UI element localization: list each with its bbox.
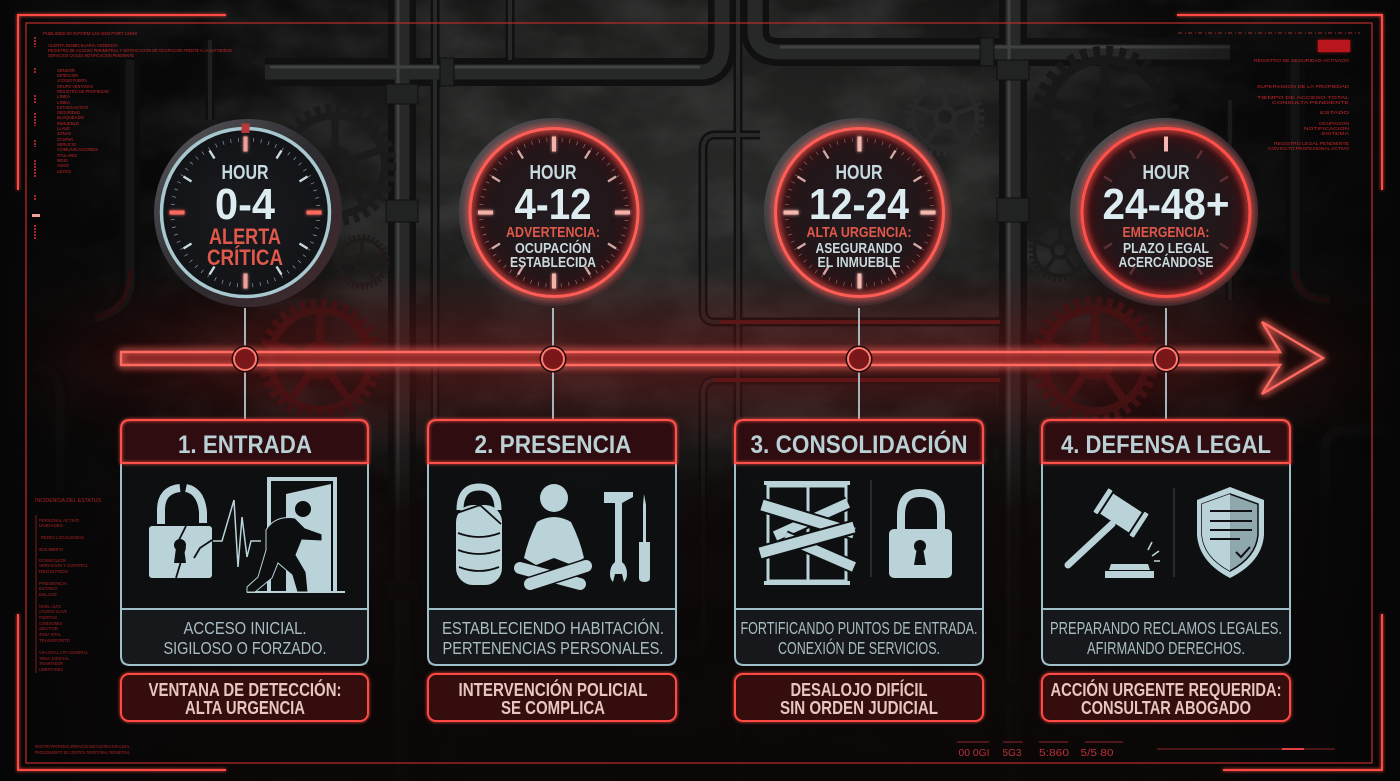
hud micro text: left middle list: UTILIDAD CLAVE xyxy=(39,609,67,615)
panel 1 description: SIGILOSO O FORZADO. xyxy=(164,638,326,658)
hud micro text: top right: CONSULTA PENDIENTE xyxy=(1272,100,1349,106)
hud micro text: left middle list: ENLACE xyxy=(39,592,57,598)
hud micro text: top left: TITULARES xyxy=(57,153,77,159)
hud micro readouts: bottom right: 00 0GI xyxy=(958,748,990,759)
hud micro text: top left: REDES xyxy=(57,158,68,164)
clock 2 text: ESTABLECIDA xyxy=(510,255,596,271)
hud micro text: top left: SEGURIDAD xyxy=(57,110,80,116)
timeline nodes xyxy=(232,346,1180,372)
callout 4 xyxy=(1042,674,1290,721)
clock 1 text: ALERTA xyxy=(209,224,281,249)
callout 3: SIN ORDEN JUDICIAL xyxy=(780,698,938,718)
callout 4: ACCIÓN URGENTE REQUERIDA: xyxy=(1050,679,1282,700)
clock 2 text: HOUR xyxy=(530,162,577,184)
clock 4 text xyxy=(1102,162,1230,271)
icon: legal shield xyxy=(1197,487,1264,578)
hud micro text: top left xyxy=(32,31,232,240)
clock 1 text xyxy=(207,162,283,270)
icon: seated person xyxy=(520,484,586,584)
icon dividers xyxy=(871,480,1174,577)
icon: closed padlock xyxy=(889,493,952,578)
callout 3 xyxy=(735,674,983,721)
timeline arrow xyxy=(121,322,1323,394)
hud micro text: top right: TIEMPO DE ACCESO TOTAL xyxy=(1257,95,1349,101)
hud micro text: left middle list: PRESENCIA xyxy=(39,581,68,587)
hud micro text: top left: REGISTRO DE PROPIEDAD xyxy=(57,89,109,95)
panel 3 heading: 3. CONSOLIDACIÓN xyxy=(750,429,968,459)
hud micro readouts: bottom right xyxy=(957,742,1335,759)
clock 3 text: ASEGURANDO xyxy=(816,241,902,257)
hud micro text: top left: PUBLIMED 00 INFORM 143 ADM PORT 12648 xyxy=(43,31,137,37)
callout 1 xyxy=(121,674,368,721)
clock 3 text: EL INMUEBLE xyxy=(818,255,901,271)
callout 4: CONSULTAR ABOGADO xyxy=(1081,698,1251,718)
hud micro text: top right: REGISTRO DE SEGURIDAD ACTIVADO xyxy=(1254,58,1349,64)
hud micro text: top left: BLOQUEADO xyxy=(57,115,84,121)
hud micro readouts: bottom right: 5:860 xyxy=(1039,748,1070,759)
hud micro text: top right: SUPERVISION DE LA PROPIEDAD xyxy=(1257,84,1350,90)
panel 4 description: AFIRMANDO DERECHOS. xyxy=(1087,638,1245,658)
clock 4 text: PLAZO LEGAL xyxy=(1123,241,1209,257)
hud micro text: top right xyxy=(1178,33,1360,152)
hud micro text: left middle list: REDES LOCALIZADAS xyxy=(41,535,84,541)
hud micro text: left middle list: PERSONAL ACTIVO xyxy=(39,518,79,524)
icon: open door xyxy=(247,479,345,593)
panel 3 description xyxy=(740,618,978,658)
clock 4 text: EMERGENCIA: xyxy=(1122,225,1210,241)
hud micro text: left middle list: SECTOR xyxy=(39,626,59,632)
hud micro text: left middle list: PUERTAS xyxy=(39,615,57,621)
clock 3 text: 12-24 xyxy=(809,180,909,229)
panel 3: consolidacion xyxy=(735,420,983,665)
hud micro text: top left: DETECCION xyxy=(57,73,78,79)
clock 4 text: HOUR xyxy=(1142,162,1190,184)
callout 1: ALTA URGENCIA xyxy=(185,698,305,718)
clock 3 text: ALTA URGENCIA: xyxy=(806,225,912,241)
panel 1: entrada xyxy=(121,420,368,665)
callout 3: DESALOJO DIFÍCIL xyxy=(790,679,928,700)
panel 4 heading: 4. DEFENSA LEGAL xyxy=(1061,431,1271,459)
icon: broken padlock xyxy=(149,488,212,578)
hud micro text: top left: ZONAS xyxy=(57,131,71,137)
clock 4: hour 24-48+ xyxy=(1070,118,1258,306)
hud micro text: left middle list: LIBERTADES xyxy=(39,667,63,673)
hud micro text: top left: ALERTA DOMICILIARIA VIGENCIA xyxy=(48,43,119,49)
hud micro readouts: bottom right: 5/5 80 xyxy=(1080,748,1114,759)
clock 1: hour 0-4 xyxy=(154,119,342,307)
hud micro text: left middle list: INCIDENCIA DEL ESTATUS xyxy=(35,498,101,504)
clock 3 text xyxy=(806,162,912,271)
hud micro text: top left: ACCESO PUERTA xyxy=(57,78,88,84)
hud micro text: left middle list: REGISTROS xyxy=(39,569,68,575)
icon: intruder figure xyxy=(247,501,322,592)
clock 3: hour 12-24 xyxy=(764,118,952,306)
icon: sleeping bag xyxy=(456,487,502,585)
clock 1 text: CRÍTICA xyxy=(207,245,283,270)
clock 4 text: 24-48+ xyxy=(1102,180,1230,229)
hud micro text: top right: REGISTRO LEGAL PENDIENTE xyxy=(1274,141,1349,147)
icon: screwdriver xyxy=(639,494,650,582)
panel 3 description: CONEXIÓN DE SERVICIOS. xyxy=(778,637,940,658)
hud micro text: left middle list: TEMA JUDICIAL xyxy=(39,656,69,662)
callout 2: SE COMPLICA xyxy=(501,698,605,718)
panel 1 description: ACCESO INICIAL. xyxy=(184,618,306,638)
hud micro text: top left: GRUPO VENTANAS xyxy=(57,84,93,90)
panel 2 heading: 2. PRESENCIA xyxy=(474,431,632,459)
hud micro text: left middle list xyxy=(35,498,130,756)
clock 1 text: 0-4 xyxy=(215,180,275,229)
panel 4 description xyxy=(1050,618,1282,658)
hud micro text: top right: SISTEMA xyxy=(1321,131,1350,137)
hud micro text: left middle list: TRAMITADOR xyxy=(39,661,63,667)
hud micro text: top left: SERVICIO xyxy=(57,142,76,148)
hud micro text: top left: LEYES xyxy=(57,169,71,175)
icon: boarded window xyxy=(760,481,854,585)
clock 1 text: HOUR xyxy=(222,162,269,184)
hud micro text: left middle list: REGISTRO PROPIEDAD OPERACION NUEVA ESTRUCTURA LEGAL xyxy=(35,744,130,750)
callout 2 xyxy=(428,674,676,721)
hud micro text: top left: COMUNICACIONES xyxy=(57,147,98,153)
icon: gavel xyxy=(1068,488,1160,578)
panel 2: presencia xyxy=(428,420,676,665)
clock 2 text xyxy=(506,162,600,271)
hud micro text: left middle list: SERVICIOS Y CONTROL xyxy=(39,563,88,569)
panel 2 description: ESTABLECIENDO HABITACIÓN. xyxy=(442,617,664,638)
hud micro text: left middle list: VIA LEGAL CITA GENERAL xyxy=(39,650,88,656)
panel 2 description: PERTENENCIAS PERSONALES. xyxy=(442,638,664,658)
clock 3 text: HOUR xyxy=(836,162,883,184)
clock 2 text: 4-12 xyxy=(514,180,592,229)
hud micro text: top left: INMUEBLE xyxy=(57,121,79,127)
hud micro text: left middle list: UNIDADES xyxy=(39,523,63,529)
hud micro text: top left: AVISO xyxy=(57,163,69,169)
hud micro text: left middle list: ZONA VITAL xyxy=(39,632,61,638)
panel 2 description xyxy=(442,617,664,658)
clock 2 text: ADVERTENCIA: xyxy=(506,225,600,241)
hud micro text: left middle list: CONEXIONES xyxy=(39,621,62,627)
hud micro text: left middle list: DOMICILIOS xyxy=(39,558,66,564)
hud micro text: top right: NOTIFICACION xyxy=(1304,126,1350,132)
hud micro text: left middle list: NIVEL ALTO xyxy=(39,604,61,610)
hud micro text: left middle list: PROCEDIMIENTO DE CONTROL TERRITORIAL PERIMETRAL xyxy=(35,750,130,756)
hud micro text: top left: SENSOR xyxy=(57,68,75,74)
panel 3 description: FORTIFICANDO PUNTOS DE ENTRADA. xyxy=(740,618,978,638)
hud micro text: left middle list: SEGUIMIENTO xyxy=(39,547,63,553)
hud micro text: top right: CONTACTO PROFESIONAL ACTIVO xyxy=(1268,146,1349,152)
callout 2: INTERVENCIÓN POLICIAL xyxy=(458,679,648,700)
panel 4: defensa legal xyxy=(1042,420,1290,665)
icon: hammer and wrench xyxy=(604,492,633,582)
panel 1 heading: 1. ENTRADA xyxy=(178,431,312,459)
clock 2 text: OCUPACIÓN xyxy=(515,239,591,257)
clock 2: hour 4-12 xyxy=(459,118,647,306)
icon: pulse line xyxy=(213,500,261,567)
hud micro text: top left: LINEA xyxy=(57,100,71,106)
hud micro text: top left: LLAVE xyxy=(57,126,70,132)
hud micro text: top left: SERVICIOS CIVILES NOTIFICACION PENDIENTE xyxy=(48,53,134,59)
hud micro text: top right: ESTADO xyxy=(1320,110,1349,116)
connectors from clocks to panels xyxy=(245,308,1166,420)
hud micro readouts: bottom right: 5G3 xyxy=(1002,748,1022,759)
hud micro text: top left: REGISTRO DE ACCESO PERIMETRAL Y NOTIFICACION DE OCUPACION FRENTE A LA AUTORIDAD xyxy=(48,48,232,54)
clock 4 text: ACERCÁNDOSE xyxy=(1118,254,1214,271)
hud micro text: top right: OCUPACION xyxy=(1319,121,1350,127)
callout 1: VENTANA DE DETECCIÓN: xyxy=(148,679,342,700)
panel 4 description: PREPARANDO RECLAMOS LEGALES. xyxy=(1050,618,1282,638)
hud micro text: left middle list: ESTADO xyxy=(39,586,57,592)
hud micro text: top left: ESTADO ACTIVO xyxy=(57,105,88,111)
panel 1 description xyxy=(164,618,326,658)
hud micro text: left middle list: TRANSPORTE xyxy=(39,638,70,644)
hud micro text: top left: OCUPAR xyxy=(57,137,73,143)
hud micro text: top left: LINEA xyxy=(57,94,71,100)
